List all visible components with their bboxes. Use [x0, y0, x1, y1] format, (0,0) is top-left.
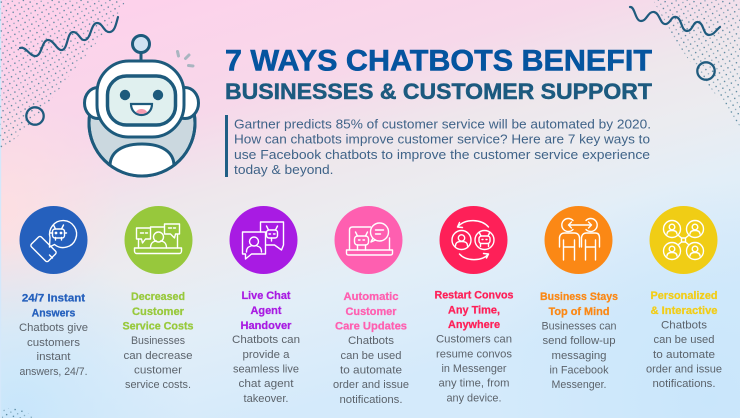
description: Businesses can [542, 320, 616, 332]
description: provide a [242, 349, 290, 361]
panel: instant answers [19, 206, 88, 378]
description [232, 334, 300, 405]
description: in Messenger [442, 363, 507, 375]
heading: Care Updates [335, 320, 407, 332]
description: to automate [653, 349, 715, 361]
heading [240, 290, 292, 332]
heading: Automatic [344, 291, 398, 303]
description: Chatbots give [19, 322, 88, 334]
heading [22, 292, 85, 320]
description: order and issue [333, 379, 409, 391]
heading: Business Stays [540, 291, 618, 303]
heading: Personalized [650, 290, 718, 302]
description: Chatbots can [232, 334, 300, 346]
heading: Top of Mind [548, 306, 610, 318]
heading: 24/7 Instant [22, 292, 85, 304]
description: notifications. [652, 378, 716, 390]
description: seamless live [233, 364, 299, 376]
panel: decreased costs [122, 206, 194, 391]
subtitle: BUSINESSES & CUSTOMER SUPPORT [225, 79, 652, 104]
squiggle: top right [630, 7, 720, 35]
heading: Handover [240, 320, 292, 332]
description [124, 335, 192, 391]
heading: Service Costs [122, 320, 194, 332]
heading [122, 291, 194, 332]
heading: Answers [32, 308, 75, 320]
panel: top of mind [540, 206, 618, 391]
intro paragraph: today & beyond. [234, 162, 334, 177]
heading [650, 290, 718, 317]
intro paragraph [234, 116, 651, 177]
heading [540, 291, 618, 318]
dot pattern: bottom left [2, 408, 34, 418]
description: to automate [340, 364, 402, 376]
description: can be used [654, 334, 714, 346]
intro paragraph: Gartner predicts 85% of customer service will be automated by 2020. [234, 116, 651, 132]
heading: Customer [346, 306, 397, 318]
panel: personalized [646, 206, 722, 390]
description: chat agent [238, 378, 294, 390]
squiggle: top left [20, 17, 118, 56]
panel: live chat handover [230, 206, 300, 405]
heading: Anywhere [448, 319, 500, 331]
heading: Restart Convos [434, 290, 514, 302]
description: takeover. [244, 393, 288, 405]
description: customer [134, 364, 182, 376]
intro paragraph: How can chatbots improve customer service? Here are 7 key ways to [234, 132, 650, 146]
intro paragraph: use Facebook chatbots to improve the customer service experience [234, 147, 650, 162]
icon: two people linked [544, 206, 612, 274]
description [19, 322, 88, 378]
icon: laptop with chat [124, 206, 192, 274]
heading: Agent [250, 305, 282, 317]
description: Chatbots [348, 335, 394, 347]
description: customers [27, 337, 80, 349]
ring: left [26, 107, 44, 125]
panel: restart convos [434, 206, 514, 404]
description: any time, from [438, 378, 510, 390]
description: instant [36, 351, 71, 363]
heading: Customer [132, 306, 185, 318]
description [436, 334, 512, 404]
description [646, 320, 722, 390]
heading: Decreased [131, 291, 185, 303]
heading [434, 290, 514, 331]
accent bar [225, 115, 228, 177]
icon: agent and bot bubbles [230, 206, 298, 274]
description: Businesses [131, 335, 185, 347]
description: send follow-up [542, 335, 616, 347]
icon: four connected users [650, 206, 718, 274]
description: can decrease [124, 350, 192, 362]
description: service costs. [125, 379, 191, 391]
description: Chatbots [661, 320, 707, 332]
panel: automatic updates [333, 206, 409, 406]
description: messaging [552, 350, 606, 362]
description [333, 335, 409, 406]
heading [335, 291, 407, 332]
ring: right [697, 62, 715, 80]
title: 7 WAYS CHATBOTS BENEFIT [225, 45, 652, 78]
description: resume convos [436, 348, 512, 360]
description: in Facebook [550, 364, 609, 376]
description: order and issue [646, 364, 722, 376]
heading: & Interactive [650, 305, 718, 317]
heading: Live Chat [242, 290, 291, 302]
dot pattern: top right [653, 0, 740, 127]
description: notifications. [340, 394, 402, 406]
description: Messenger. [552, 379, 606, 391]
description: answers, 24/7. [20, 366, 88, 378]
description: any device. [446, 392, 502, 404]
icon: phone and chatbot bubble [20, 206, 88, 274]
icon: robot mascot [84, 36, 198, 178]
description: Customers can [436, 334, 512, 346]
icon: laptop bot [334, 206, 402, 274]
dot pattern: top left [0, 0, 126, 150]
heading: Any Time, [448, 304, 500, 316]
description: can be used [340, 350, 402, 362]
icon: person and bot cycle [440, 206, 508, 274]
description [542, 320, 616, 391]
